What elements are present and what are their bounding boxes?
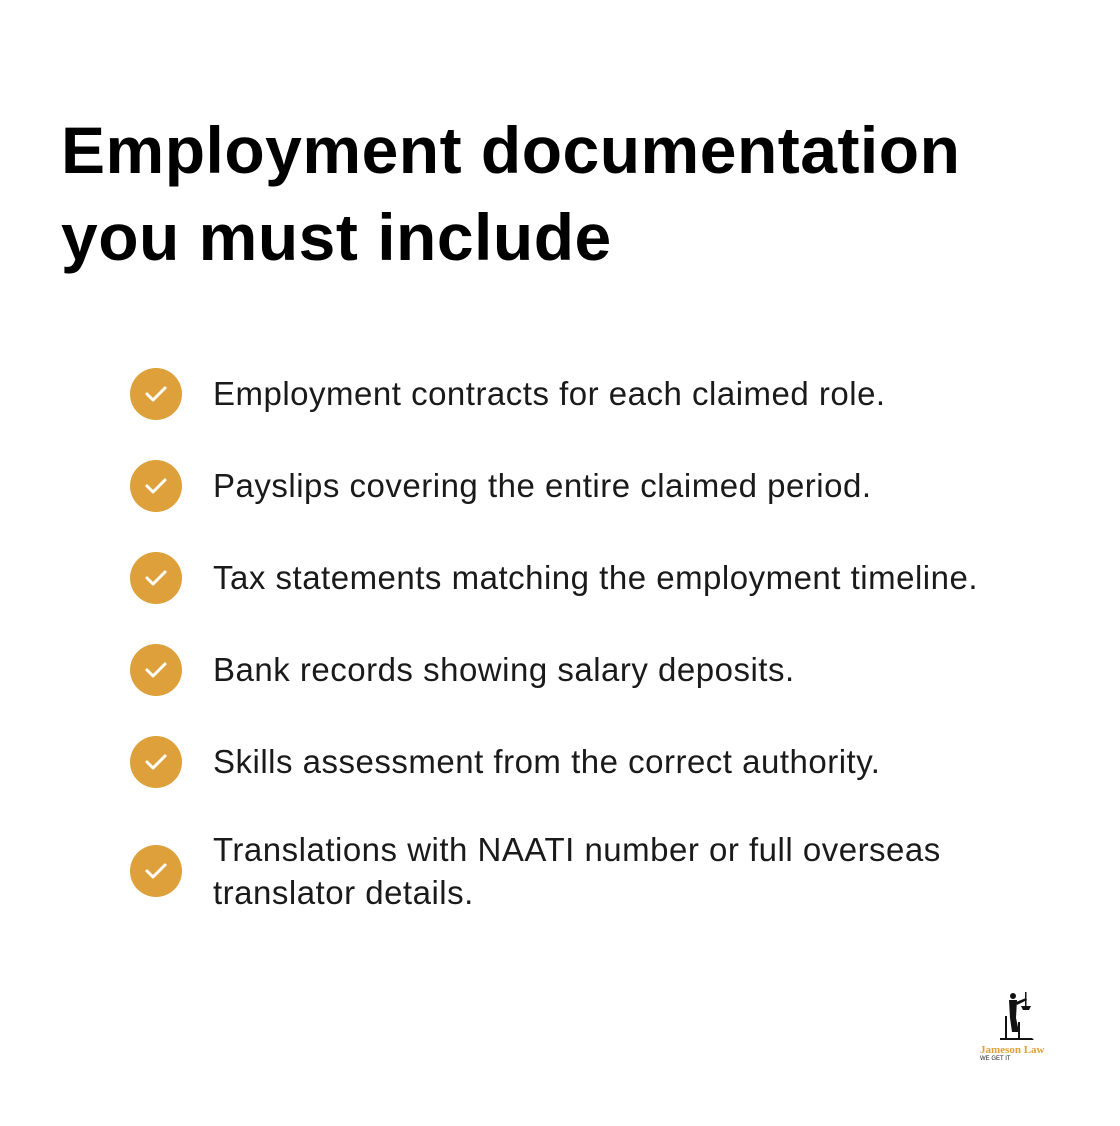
item: bank <box>130 644 795 696</box>
item: tax <box>130 552 978 604</box>
text: Skills assessment from the correct authority. <box>213 743 880 780</box>
icon: check <box>130 368 182 420</box>
text: Payslips covering the entire claimed period. <box>213 467 872 504</box>
text: Employment contracts for each claimed role. <box>213 375 886 412</box>
logo <box>980 992 1044 1062</box>
text <box>213 831 941 911</box>
text: WE GET IT: WE GET IT <box>980 1056 1011 1062</box>
icon: check <box>130 845 182 897</box>
text: Tax statements matching the employment timeline. <box>213 559 978 596</box>
title: Employment documentation <box>61 113 960 187</box>
text: translator details. <box>213 874 474 911</box>
text: Jameson Law: Jameson Law <box>980 1044 1044 1056</box>
title: you must include <box>61 200 612 274</box>
item: translations <box>130 831 941 911</box>
text: Translations with NAATI number or full overseas <box>213 831 941 868</box>
icon: lady justice <box>1000 992 1034 1040</box>
icon: check <box>130 460 182 512</box>
item: payslips <box>130 460 872 512</box>
icon: check <box>130 644 182 696</box>
icon: check <box>130 552 182 604</box>
text: Bank records showing salary deposits. <box>213 651 795 688</box>
title <box>61 113 960 274</box>
item: skills <box>130 736 880 788</box>
item: contracts <box>130 368 886 420</box>
icon: check <box>130 736 182 788</box>
